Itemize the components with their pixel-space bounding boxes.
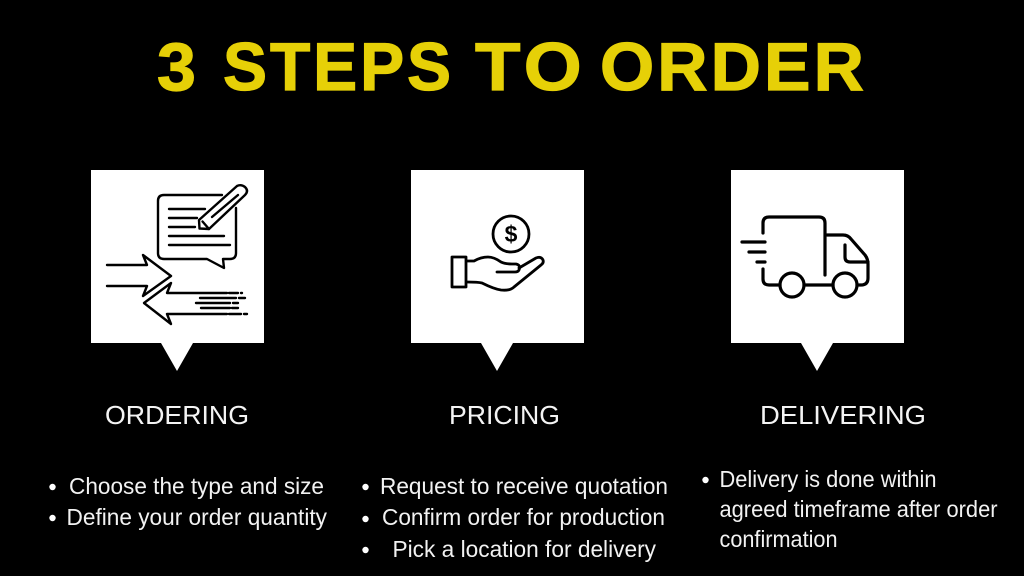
list: ordering: Choose the type and size [69,473,324,499]
icon: delivery truck [742,217,868,297]
list: pricing: Pick a location for delivery [392,536,656,562]
panel: ordering [91,170,264,371]
list: delivering: agreed timeframe after order [720,496,998,522]
list: ordering: Define your order quantity [66,504,327,530]
icon: hand holding coin [452,216,543,290]
panel: pricing [411,170,584,371]
panel: delivering [731,170,904,371]
title: 3 [157,29,199,105]
card: ordering [91,170,264,371]
heading: delivering: DELIVERING [760,402,926,430]
list: pricing [362,473,668,562]
list: delivering: confirmation [720,526,838,552]
list: delivering: Delivery is done within [720,466,936,492]
card: pricing [411,170,584,371]
icon: speech bubble with pencil [158,185,247,268]
list: delivering [702,466,998,552]
heading: ordering: ORDERING [105,402,249,430]
title [157,29,867,105]
icon: dollar sign: $ [505,221,518,247]
title: ORDER [600,29,867,105]
list: pricing: Request to receive quotation [380,473,668,499]
title: TO [475,29,585,105]
list: ordering [49,473,327,530]
list: pricing: Confirm order for production [382,504,665,530]
title: STEPS [223,29,454,105]
icon: two-way arrows [107,255,247,324]
card: delivering [731,170,904,371]
heading: pricing: PRICING [449,402,560,430]
